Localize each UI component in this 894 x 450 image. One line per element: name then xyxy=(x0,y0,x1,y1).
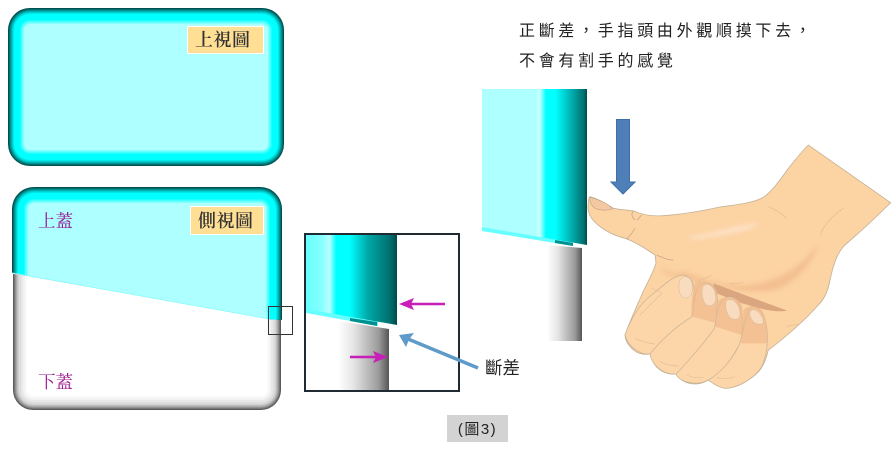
arrow: step pointer xyxy=(399,333,478,368)
label: step: 斷差 xyxy=(485,358,520,378)
panel: side view lower lid xyxy=(13,274,281,410)
caption: (圖3) xyxy=(458,421,497,438)
shading: palm fold xyxy=(658,243,818,292)
shading: fold above fingers xyxy=(713,283,787,311)
highlight: thumb muscle xyxy=(687,223,758,239)
icon: thumb nail xyxy=(590,197,613,210)
label: top view xyxy=(188,26,264,54)
panel: enlarged detail xyxy=(305,234,459,391)
text block: explanation xyxy=(519,22,815,70)
creases: fingers xyxy=(635,288,735,379)
label: top view: 上視圖 xyxy=(195,30,250,50)
icon: hand xyxy=(588,145,891,388)
marker: detail square xyxy=(268,306,292,334)
shading: finger knuckles xyxy=(691,281,767,343)
finger: index xyxy=(625,275,694,354)
arrow: lower step magenta xyxy=(350,351,388,363)
finger: ring xyxy=(676,297,742,383)
arrow: upper step magenta xyxy=(399,298,445,310)
icon: fingernails xyxy=(679,277,763,324)
label: side view: 側視圖 xyxy=(198,211,254,231)
panel: enlarged front view xyxy=(482,89,587,341)
finger: little xyxy=(708,307,767,388)
text block: explanation: 正斷差，手指頭由外觀順摸下去， xyxy=(519,22,815,40)
label: upper lid: 上蓋 xyxy=(38,211,73,231)
label: lower lid: 下蓋 xyxy=(38,372,73,392)
caption xyxy=(447,415,508,442)
creases: hand back xyxy=(695,207,843,327)
arrow: downward motion xyxy=(611,120,635,194)
text block: explanation: 不會有割手的感覺 xyxy=(519,51,677,70)
panel: top view lid xyxy=(8,8,284,166)
label: side view xyxy=(190,206,264,234)
finger: middle xyxy=(650,283,717,374)
creases: thumb and wrist xyxy=(627,211,673,260)
panel: side view upper lid xyxy=(12,187,282,320)
